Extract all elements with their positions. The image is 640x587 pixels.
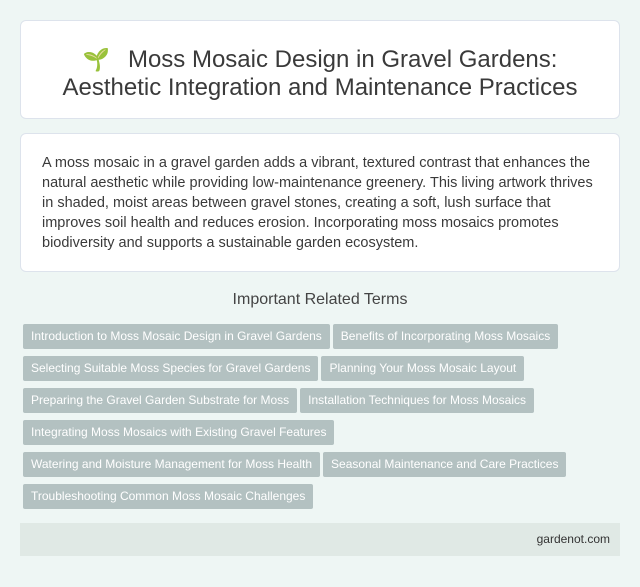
title card	[20, 20, 620, 119]
related terms tags: Seasonal Maintenance and Care Practices	[331, 457, 558, 471]
related terms tags: Introduction to Moss Mosaic Design in Gravel Gardens	[31, 329, 322, 343]
title: Aesthetic Integration and Maintenance Practices	[63, 74, 577, 101]
related terms tags: Installation Techniques for Moss Mosaics	[308, 393, 526, 407]
section heading: Important Related Terms	[233, 291, 407, 308]
footer	[20, 523, 620, 556]
related terms tags: Preparing the Gravel Garden Substrate for Moss	[31, 393, 289, 407]
related terms tags: Watering and Moisture Management for Moss Health	[31, 457, 312, 471]
paragraph: A moss mosaic in a gravel garden adds a vibrant, textured contrast that enhances the natural aesthetic while providing low-maintenance greenery. This living artwork thrives in shaded, moist areas between gravel stones, creating a soft, lush surface that improves soil health and reduces erosion. Incorporating moss mosaics promotes biodiversity and supports a sustainable garden ecosystem.	[42, 155, 593, 251]
title	[62, 46, 577, 101]
related terms tags: Integrating Moss Mosaics with Existing Gravel Features	[31, 425, 326, 439]
related terms tags: Selecting Suitable Moss Species for Gravel Gardens	[31, 361, 310, 375]
description panel	[20, 133, 620, 272]
related terms tags	[23, 324, 566, 509]
related terms tags: Troubleshooting Common Moss Mosaic Challenges	[31, 489, 305, 503]
related terms tags: Benefits of Incorporating Moss Mosaics	[341, 329, 550, 343]
title: 🌱 Moss Mosaic Design in Gravel Gardens:	[83, 46, 557, 73]
footer: gardenot.com	[537, 532, 610, 546]
related terms tags: Planning Your Moss Mosaic Layout	[329, 361, 516, 375]
